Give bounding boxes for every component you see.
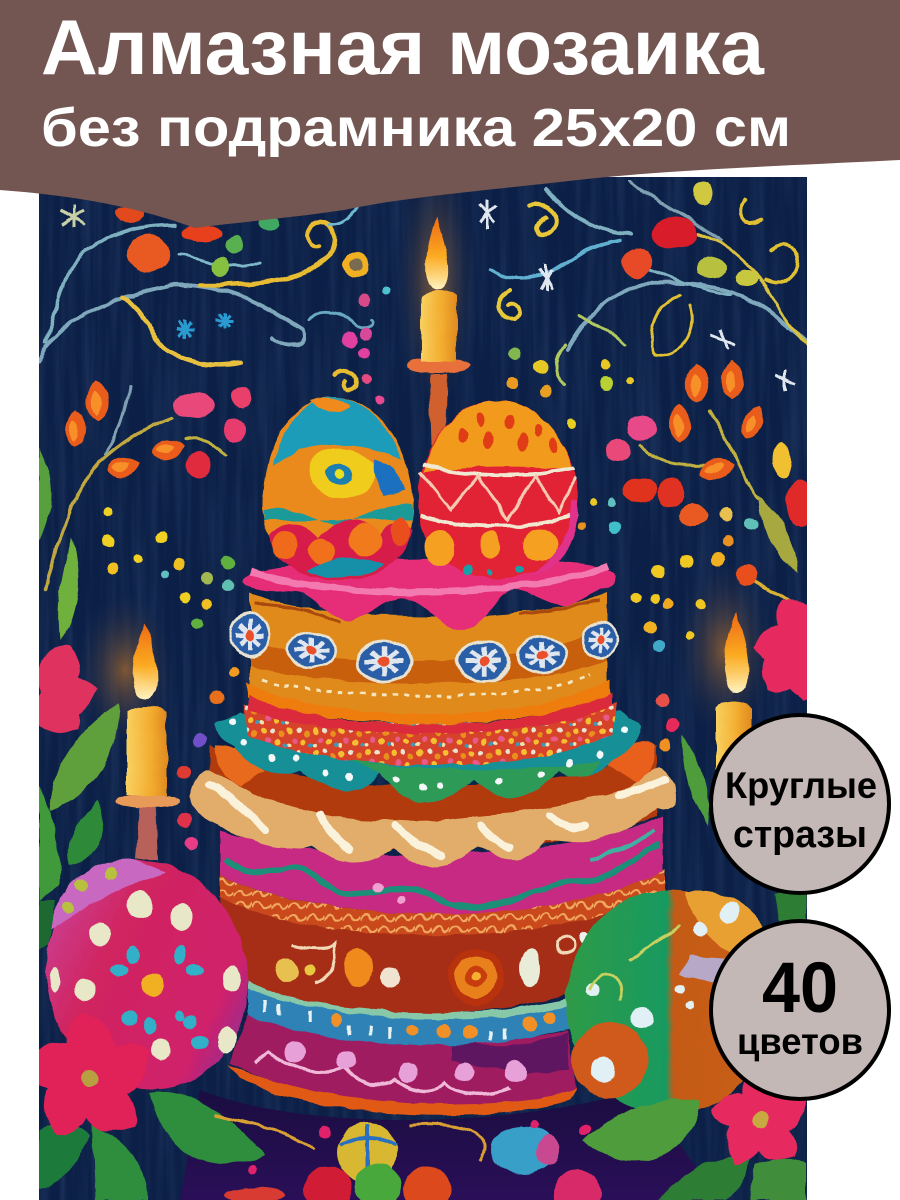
flower: bottom right: [711, 1082, 806, 1166]
floral swirls: top left: [39, 200, 371, 590]
cake magenta swirl layer: [220, 815, 663, 914]
tulips and buds: [66, 181, 814, 527]
lace rim: [220, 868, 665, 935]
cake bottom magenta layer: [230, 1013, 577, 1108]
flower: right pink: [753, 599, 807, 701]
badge: round rhinestones: стразы: [733, 814, 867, 856]
painting background: [39, 177, 807, 1200]
title: Алмазная мозаика: [41, 3, 765, 91]
floor: [180, 1090, 720, 1200]
brush texture: [39, 177, 807, 1200]
orange layers: [250, 593, 607, 724]
subtitle: без подрамника 25х20 см: [41, 98, 791, 158]
left painted egg: [45, 858, 248, 1090]
confetti dots: [103, 286, 758, 850]
badge: 40 colours: 40: [762, 949, 838, 1028]
right candle: [716, 612, 752, 770]
star sprigs: [62, 200, 795, 392]
sprinkle layer: [243, 703, 617, 765]
foreground leaves: [39, 1092, 807, 1200]
candle glows: [88, 194, 762, 732]
badge: 40 colours: [711, 921, 889, 1099]
floral swirls: top right: [490, 180, 807, 610]
header banner: [0, 0, 900, 228]
flower: left pink: [39, 644, 98, 733]
painted scene: [19, 180, 828, 1200]
beads on the table: [215, 1115, 601, 1200]
pink icing: [243, 558, 616, 630]
cake red layer: [220, 897, 608, 1014]
top candle: [406, 217, 470, 445]
flower: bottom left: [39, 1013, 150, 1136]
badge: 40 colours: цветов: [737, 1021, 863, 1062]
cake blue band: [248, 988, 570, 1046]
side leaves: [39, 447, 807, 950]
teal scallop band: [215, 710, 642, 802]
cream ruffle: [190, 767, 677, 867]
badge: round rhinestones: [711, 715, 889, 893]
cake: [190, 558, 677, 1115]
left candle: [116, 623, 180, 860]
badge: round rhinestones: Круглые: [725, 765, 877, 806]
top egg: red patterned: [418, 400, 578, 578]
painting: Easter cake with eggs and candles: [19, 150, 828, 1200]
blue medallions: [229, 612, 271, 658]
top egg: blue and orange: [263, 397, 413, 580]
cake brown belt: [210, 745, 657, 849]
right painted egg: [566, 890, 774, 1114]
